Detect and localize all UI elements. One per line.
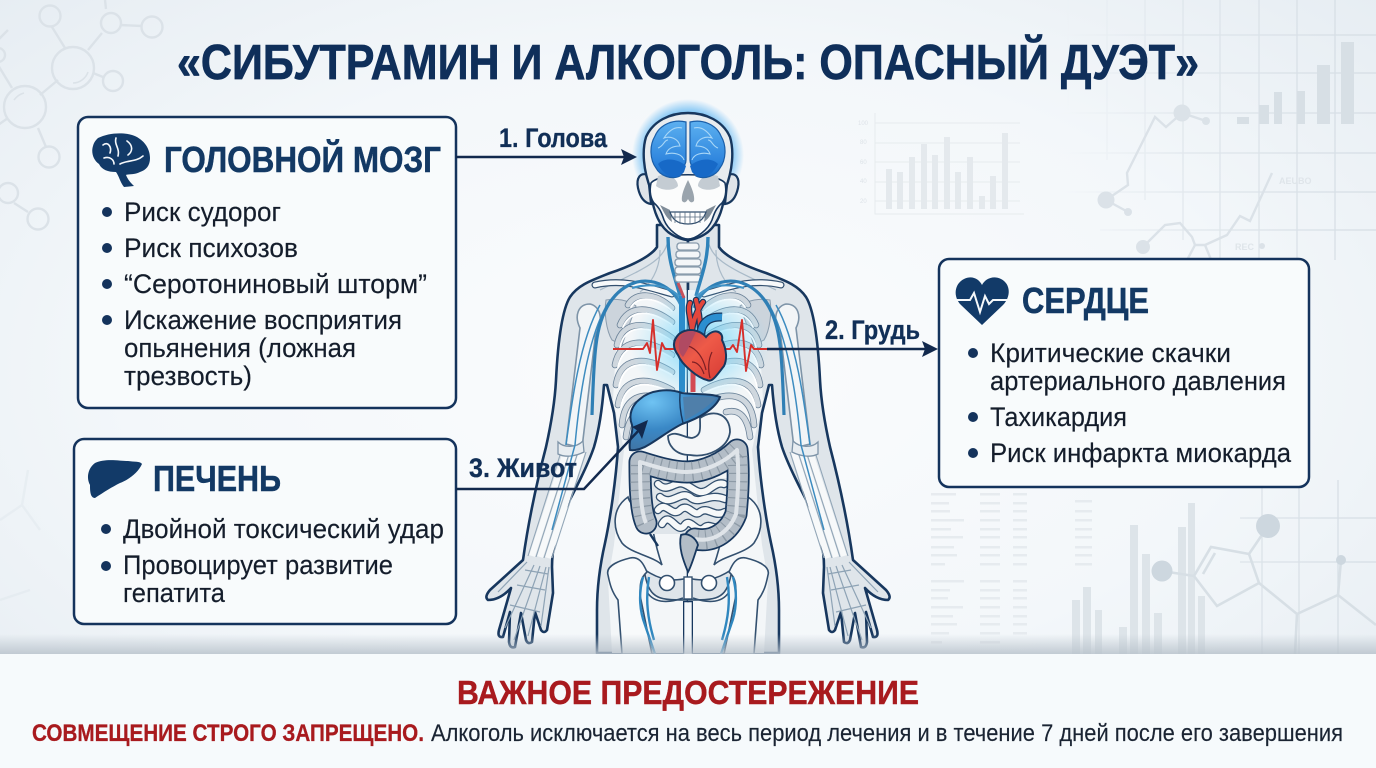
bullet list: Провоцирует развитие [123,550,393,580]
icon: brain [92,133,150,187]
bullet list: гепатита [123,578,226,608]
pelvis [645,570,688,600]
brain [651,121,725,178]
arrow label: head: 1. Голова [499,123,608,153]
scapula [605,299,636,345]
arrow label: abdomen: 3. Живот [469,453,577,483]
bullet list: опьянения (ложная [124,333,356,363]
chart: background bars, top: 80 [860,140,867,146]
warning text [32,720,1343,747]
bullet list [968,338,1292,468]
background: REC [1235,242,1255,252]
bullet list [101,514,444,608]
arrow label: chest [767,315,938,357]
iliac wing [615,497,662,565]
heading: СЕРДЦЕ [1022,280,1149,321]
warning text: СОВМЕЩЕНИЕ СТРОГО ЗАПРЕЩЕНО. [32,720,424,747]
icon: heart with pulse [956,277,1009,325]
bullet list: Риск психозов [124,233,298,263]
bullet list: Тахикардия [990,402,1127,432]
small intestine [650,478,730,534]
bullet list [102,197,427,391]
torso interior [608,290,688,653]
arrow label: head [456,123,637,165]
background: AEUBO [1279,176,1312,186]
arm vessels [552,300,610,530]
chest glow [630,287,770,403]
neck and shoulder muscles [600,240,668,292]
panel: heart [939,259,1309,487]
chart: background bars, top: 20 [860,199,867,205]
bullet list: Риск судорог [124,197,281,227]
chart: background bars, top: 60 [860,160,867,166]
bullet list: Риск инфаркта миокарда [990,438,1292,468]
forearm bones [532,452,582,558]
humerus [566,304,600,448]
chart: background bars, top: 40 [860,179,867,185]
heading: ПЕЧЕНЬ [153,458,281,499]
neck vessel [668,237,680,296]
hand bones [498,562,549,640]
head glow [632,99,744,211]
clavicle [595,283,672,294]
bullet list: Критические скачки [990,338,1231,368]
bullet list: Двойной токсический удар [123,514,444,544]
panel: brain [78,117,456,408]
panel: liver [74,439,456,624]
bullet list: артериального давления [990,366,1286,396]
liver [630,390,720,450]
ribs [615,296,672,437]
bullet list: трезвость) [124,361,252,391]
large intestine [640,450,738,546]
chart: background bars, top [858,113,1024,214]
bullet list: Искажение восприятия [124,305,402,335]
vertebra [675,243,701,282]
rectum [680,534,698,572]
bottom shadow [0,634,1376,654]
anatomical figure [486,99,890,654]
bullet list: “Серотониновый шторм” [124,269,427,299]
femur [608,558,652,654]
aorta and vena cava [678,283,693,392]
title: «СИБУТРАМИН И АЛКОГОЛЬ: ОПАСНЫЙ ДУЭТ» [177,35,1199,90]
warning band [0,654,1376,768]
pubic symphysis and spine [684,577,692,599]
leg vessel [640,577,655,654]
subclavian vessel [592,281,682,415]
skull and head [637,113,739,240]
icon: liver [88,460,142,498]
warning heading: ВАЖНОЕ ПРЕДОСТЕРЕЖЕНИЕ [457,674,919,711]
stomach [668,413,730,456]
heart [674,300,726,381]
chart: background bars, top: 100 [858,121,869,127]
arrow label: chest: 2. Грудь [825,315,920,345]
heading: ГОЛОВНОЙ МОЗГ [164,138,441,180]
ECG pulse [613,320,767,371]
arrow label: abdomen [456,420,648,489]
